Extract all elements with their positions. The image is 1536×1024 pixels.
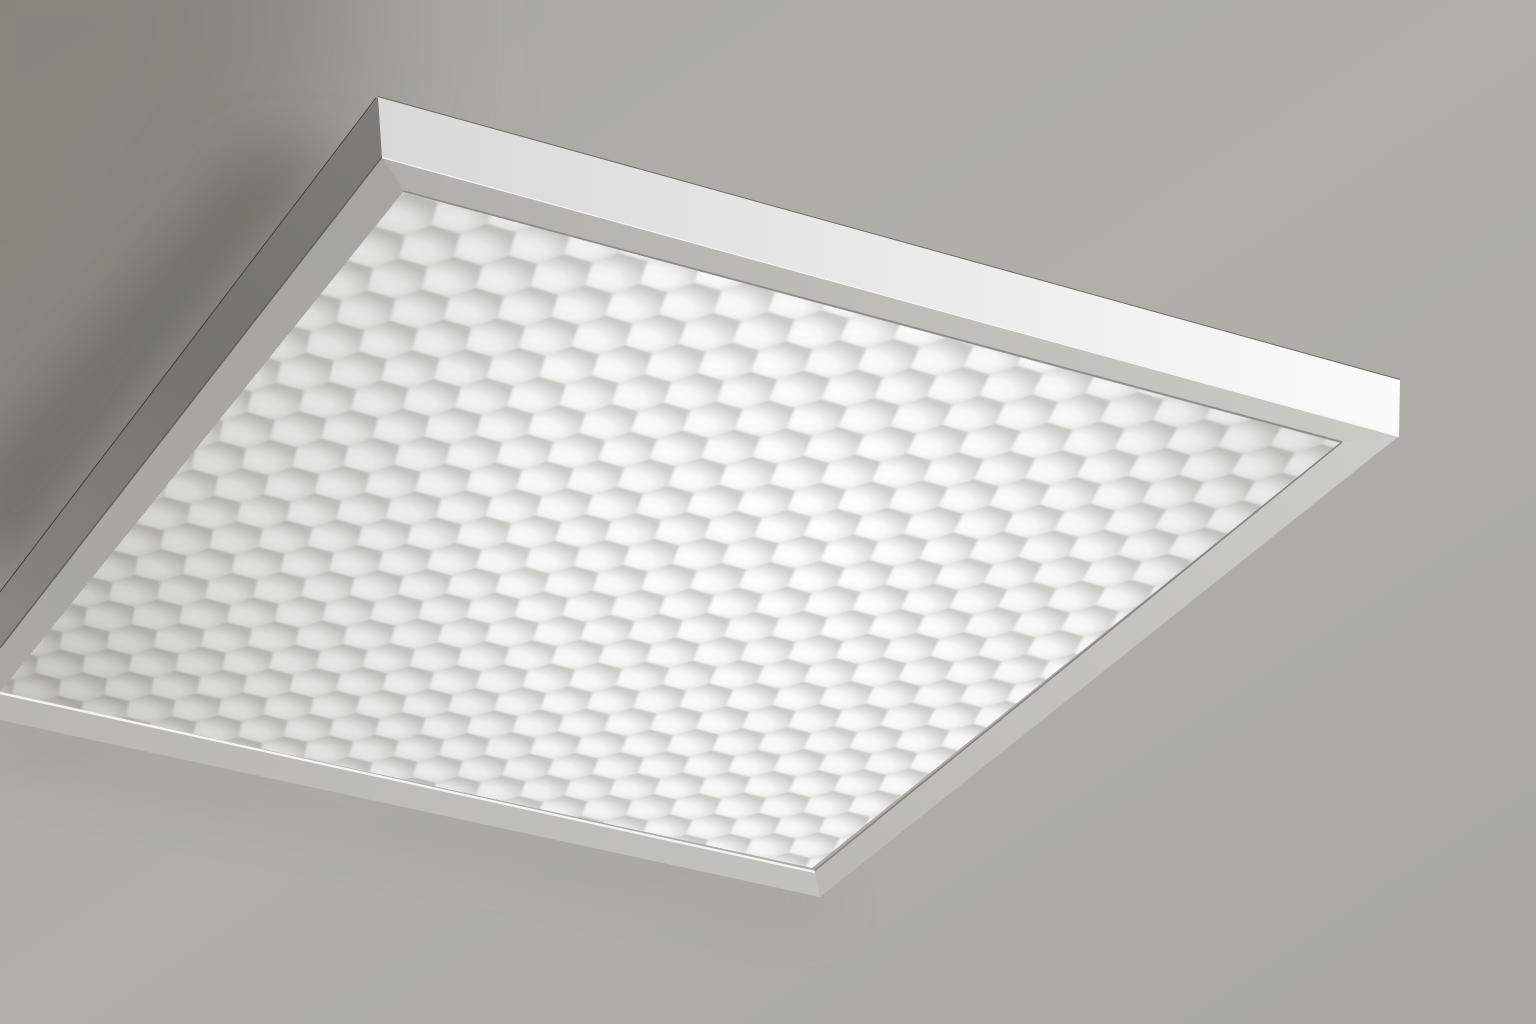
frame: left bevel: [0, 157, 403, 692]
frame: outer left wall: [0, 97, 382, 648]
edge: strip top shadow line: [378, 96, 1400, 380]
edge: left groove line: [0, 157, 382, 648]
frame: right bevel: [815, 436, 1399, 897]
frame: bottom bevel: [0, 692, 820, 897]
edge: top inner shadow line: [403, 191, 1342, 442]
edge: right inner shadow line: [814, 442, 1342, 871]
honeycomb diffuser panel: [0, 192, 1340, 868]
frame: top bevel: [382, 157, 1399, 441]
frame: top white side strip: [378, 97, 1400, 436]
edge: bottom highlight line: [0, 693, 815, 872]
edge: outer wall dark line: [0, 98, 376, 592]
edge: strip lower highlight: [382, 158, 1399, 436]
